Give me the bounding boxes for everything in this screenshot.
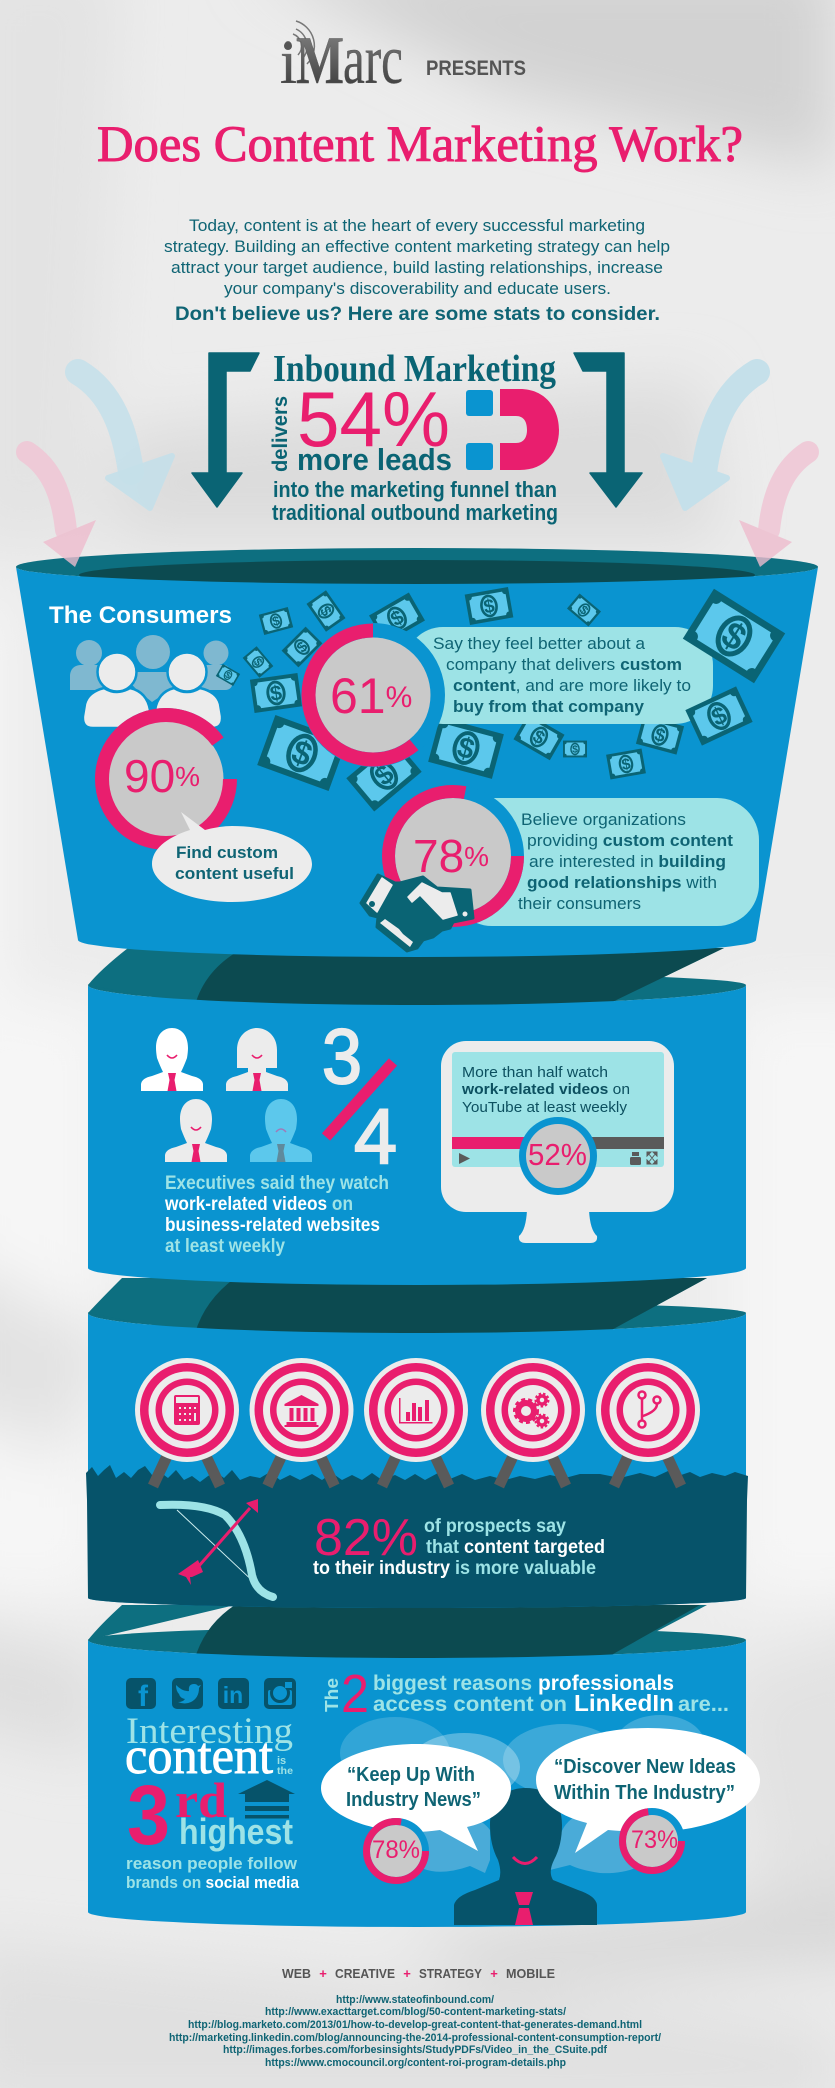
social media stat text: highest — [179, 1811, 293, 1852]
stat 61 percent — [301, 623, 445, 767]
monitor — [441, 1041, 674, 1243]
monitor text: YouTube at least weekly — [462, 1099, 628, 1116]
icon: handshake — [361, 875, 473, 951]
funnel body — [88, 985, 746, 1285]
stat 78 percent: % — [464, 841, 489, 872]
funnel body — [88, 1640, 746, 1927]
section 3: targets — [86, 1278, 748, 1608]
icon: bow and arrow — [160, 1499, 273, 1597]
target: branch — [596, 1358, 700, 1486]
footer tagline: STRATEGY — [419, 1966, 482, 1981]
footer sources: http://www.stateofinbound.com/ — [336, 1994, 494, 2006]
stat 90 percent: % — [175, 761, 200, 792]
dollar bills: $ — [293, 638, 312, 656]
intro text: attract your target audience, build lasting relationships, increase — [171, 258, 663, 277]
speech bubble: find custom content: content useful — [175, 864, 294, 883]
target: calculator — [135, 1358, 239, 1486]
social media stat text: content — [125, 1728, 274, 1785]
stat 90 percent: 90 — [124, 750, 175, 802]
footer tagline: MOBILE — [506, 1966, 555, 1981]
82 percent stat — [313, 1509, 605, 1579]
funnel body — [88, 1313, 746, 1608]
dollar bills: $ — [620, 756, 632, 774]
stat 90 percent — [95, 708, 237, 850]
social media stat text: rd — [175, 1772, 227, 1828]
footer tagline: WEB — [282, 1966, 311, 1981]
82 percent stat: that content targeted — [426, 1537, 605, 1558]
inbound body text — [272, 477, 558, 525]
linkedin heading: access content on — [373, 1693, 567, 1716]
stat 78 percent — [363, 1818, 429, 1884]
right bracket arrow — [574, 353, 642, 507]
executive silhouette — [454, 1788, 597, 1925]
52 percent stat: 52% — [528, 1137, 587, 1172]
52 percent stat — [519, 1117, 597, 1195]
speech bubble: find custom content: Find custom — [176, 843, 278, 862]
ground with grass — [86, 1465, 748, 1608]
dollar bills: $ — [572, 744, 578, 756]
dollar bills: $ — [368, 758, 400, 792]
callout: 61 percent: content, and are more likely to — [453, 676, 691, 695]
quote bubble: industry news: Industry News” — [346, 1789, 481, 1811]
executives text: at least weekly — [165, 1236, 285, 1257]
three quarters fraction: 3 — [322, 1012, 362, 1100]
linkedin heading: professionals — [538, 1672, 674, 1695]
footer sources: https://www.cmocouncil.org/content-roi-program-details.php — [265, 2057, 566, 2069]
monitor text: More than half watch — [462, 1064, 608, 1081]
progress bar — [452, 1137, 664, 1165]
social icons — [126, 1678, 296, 1713]
linkedin heading: biggest reasons — [373, 1672, 532, 1695]
three quarters fraction: 4 — [354, 1092, 397, 1180]
callout: 61 percent: Say they feel better about a — [433, 634, 646, 653]
stat 78 percent: 78 — [413, 830, 464, 882]
linkedin heading: LinkedIn — [574, 1690, 674, 1716]
delivers 54 percent: 54% — [297, 375, 450, 463]
footer tagline: + — [319, 1966, 327, 1981]
dollar bills: $ — [529, 725, 549, 749]
82 percent stat: 82% — [314, 1509, 418, 1567]
footer sources: http://www.exacttarget.com/blog/50-content-marketing-stats/ — [265, 2006, 566, 2018]
footer sources: http://blog.marketo.com/2013/01/how-to-develop-great-content-that-generates-demand.html — [188, 2019, 642, 2031]
footer sources: http://marketing.linkedin.com/blog/announcing-the-2014-professional-content-consumption-report/ — [169, 2032, 661, 2044]
social icons: in — [223, 1682, 243, 1708]
icon: group of people — [70, 635, 233, 728]
footer tagline: + — [403, 1966, 411, 1981]
executives text: work-related videos on — [164, 1194, 353, 1215]
executives text — [164, 1173, 389, 1257]
dollar bills: $ — [269, 681, 284, 706]
dollar bills: $ — [482, 595, 497, 618]
icon: magnet — [466, 389, 559, 470]
target: bar chart — [364, 1358, 468, 1486]
delivers 54 percent: delivers — [269, 396, 292, 472]
monitor text: work-related videos on — [461, 1081, 630, 1098]
footer tagline: CREATIVE — [335, 1966, 395, 1981]
linkedin heading — [322, 1664, 729, 1724]
delivers 54 percent: more leads — [297, 442, 452, 477]
section 4: social and LinkedIn — [88, 1605, 760, 1927]
footer tagline — [282, 1966, 555, 1981]
monitor text — [461, 1064, 630, 1116]
large bills over the callout: $ — [714, 613, 754, 659]
footer sources — [169, 1994, 661, 2069]
linkedin heading: are... — [678, 1693, 729, 1716]
stat 73 percent: 73% — [631, 1826, 678, 1854]
logo: i — [280, 29, 297, 97]
quote bubble: industry news: “Keep Up With — [347, 1764, 475, 1786]
callout: 78 percent: their consumers — [518, 894, 641, 913]
callout: 78 percent: are interested in building — [529, 852, 726, 871]
large bills over the callout: $ — [707, 702, 732, 732]
social media stat text: Interesting — [126, 1711, 293, 1752]
section 2: executives and video — [88, 948, 746, 1285]
three quarters fraction — [322, 1012, 397, 1180]
heading: the consumers: The Consumers — [49, 602, 232, 629]
social media stat text: reason people follow — [126, 1854, 298, 1873]
stat 73 percent — [619, 1808, 685, 1874]
social media stat text: 3 — [127, 1768, 170, 1862]
social media stat text — [125, 1711, 299, 1892]
quote bubble: new ideas — [536, 1728, 760, 1853]
footer sources: http://images.forbes.com/forbesinsights/StudyPDFs/Video_in_the_CSuite.pdf — [223, 2044, 607, 2056]
stat 78 percent — [382, 785, 524, 927]
stat 61 percent: % — [386, 681, 412, 714]
presents label: PRESENTS — [426, 57, 526, 80]
callout: 78 percent — [450, 798, 759, 926]
dollar bills: $ — [287, 733, 317, 775]
logo — [280, 21, 526, 99]
background speech bubbles — [340, 1715, 705, 1873]
executives text: Executives said they watch — [165, 1173, 389, 1194]
dollar bills: $ — [271, 613, 282, 629]
dollar bills: $ — [652, 723, 668, 746]
left bracket arrow — [192, 353, 259, 507]
section 1: the consumers funnel — [16, 548, 818, 957]
large bills over the callout — [683, 589, 785, 746]
social media stat text: brands on social media — [126, 1873, 299, 1892]
executives text: business-related websites — [165, 1215, 380, 1236]
dollar bills: $ — [316, 603, 335, 620]
logo: M — [296, 22, 344, 98]
dollar bills: $ — [251, 656, 264, 669]
82 percent stat: to their industry is more valuable — [313, 1558, 596, 1579]
speech bubble: find custom content — [152, 812, 312, 902]
dollar bills — [216, 587, 684, 812]
callout: 78 percent: Believe organizations — [521, 810, 686, 829]
intro text: strategy. Building an effective content marketing strategy can help — [164, 237, 670, 256]
faded arrows — [27, 372, 808, 567]
callout: 61 percent: company that delivers custom — [446, 655, 682, 674]
funnel body — [16, 567, 818, 957]
intro text: Today, content is at the heart of every successful marketing — [189, 216, 645, 235]
title: Does Content Marketing Work? — [97, 117, 743, 173]
social media stat text: is — [277, 1755, 286, 1767]
intro text — [164, 216, 670, 298]
dollar bills: $ — [577, 603, 591, 618]
82 percent stat: of prospects say — [424, 1516, 566, 1537]
linkedin heading: The — [322, 1678, 342, 1712]
inbound marketing stat — [192, 348, 642, 525]
inbound body text: traditional outbound marketing — [272, 500, 558, 525]
dollar bills: $ — [454, 731, 478, 766]
social media stat text: the — [277, 1766, 293, 1777]
dollar bills: $ — [223, 669, 233, 681]
callout: 61 percent — [405, 627, 713, 724]
callout: 78 percent: providing custom content — [527, 831, 733, 850]
heading: inbound marketing: Inbound Marketing — [273, 348, 556, 390]
callout: 61 percent: buy from that company — [453, 697, 645, 716]
target: gears — [481, 1358, 585, 1486]
quote bubble: new ideas: Within The Industry” — [554, 1782, 735, 1804]
callout: 78 percent: good relationships with — [527, 873, 717, 892]
inbound body text: into the marketing funnel than — [273, 477, 557, 502]
stat 61 percent: 61 — [330, 668, 386, 724]
logo: arc — [343, 22, 403, 99]
stat 78 percent: 78% — [372, 1836, 420, 1864]
intro callout: Don't believe us? Here are some stats to consider. — [175, 304, 660, 325]
quote bubble: new ideas: “Discover New Ideas — [554, 1756, 736, 1778]
dollar bills: $ — [387, 606, 408, 631]
intro text: your company's discoverability and educate users. — [224, 279, 611, 298]
social icons: f — [138, 1680, 149, 1713]
target: bank — [250, 1358, 354, 1486]
footer tagline: + — [490, 1966, 498, 1981]
linkedin heading: 2 — [341, 1664, 369, 1724]
quote bubble: industry news — [321, 1744, 511, 1851]
executives icons — [141, 1028, 312, 1162]
